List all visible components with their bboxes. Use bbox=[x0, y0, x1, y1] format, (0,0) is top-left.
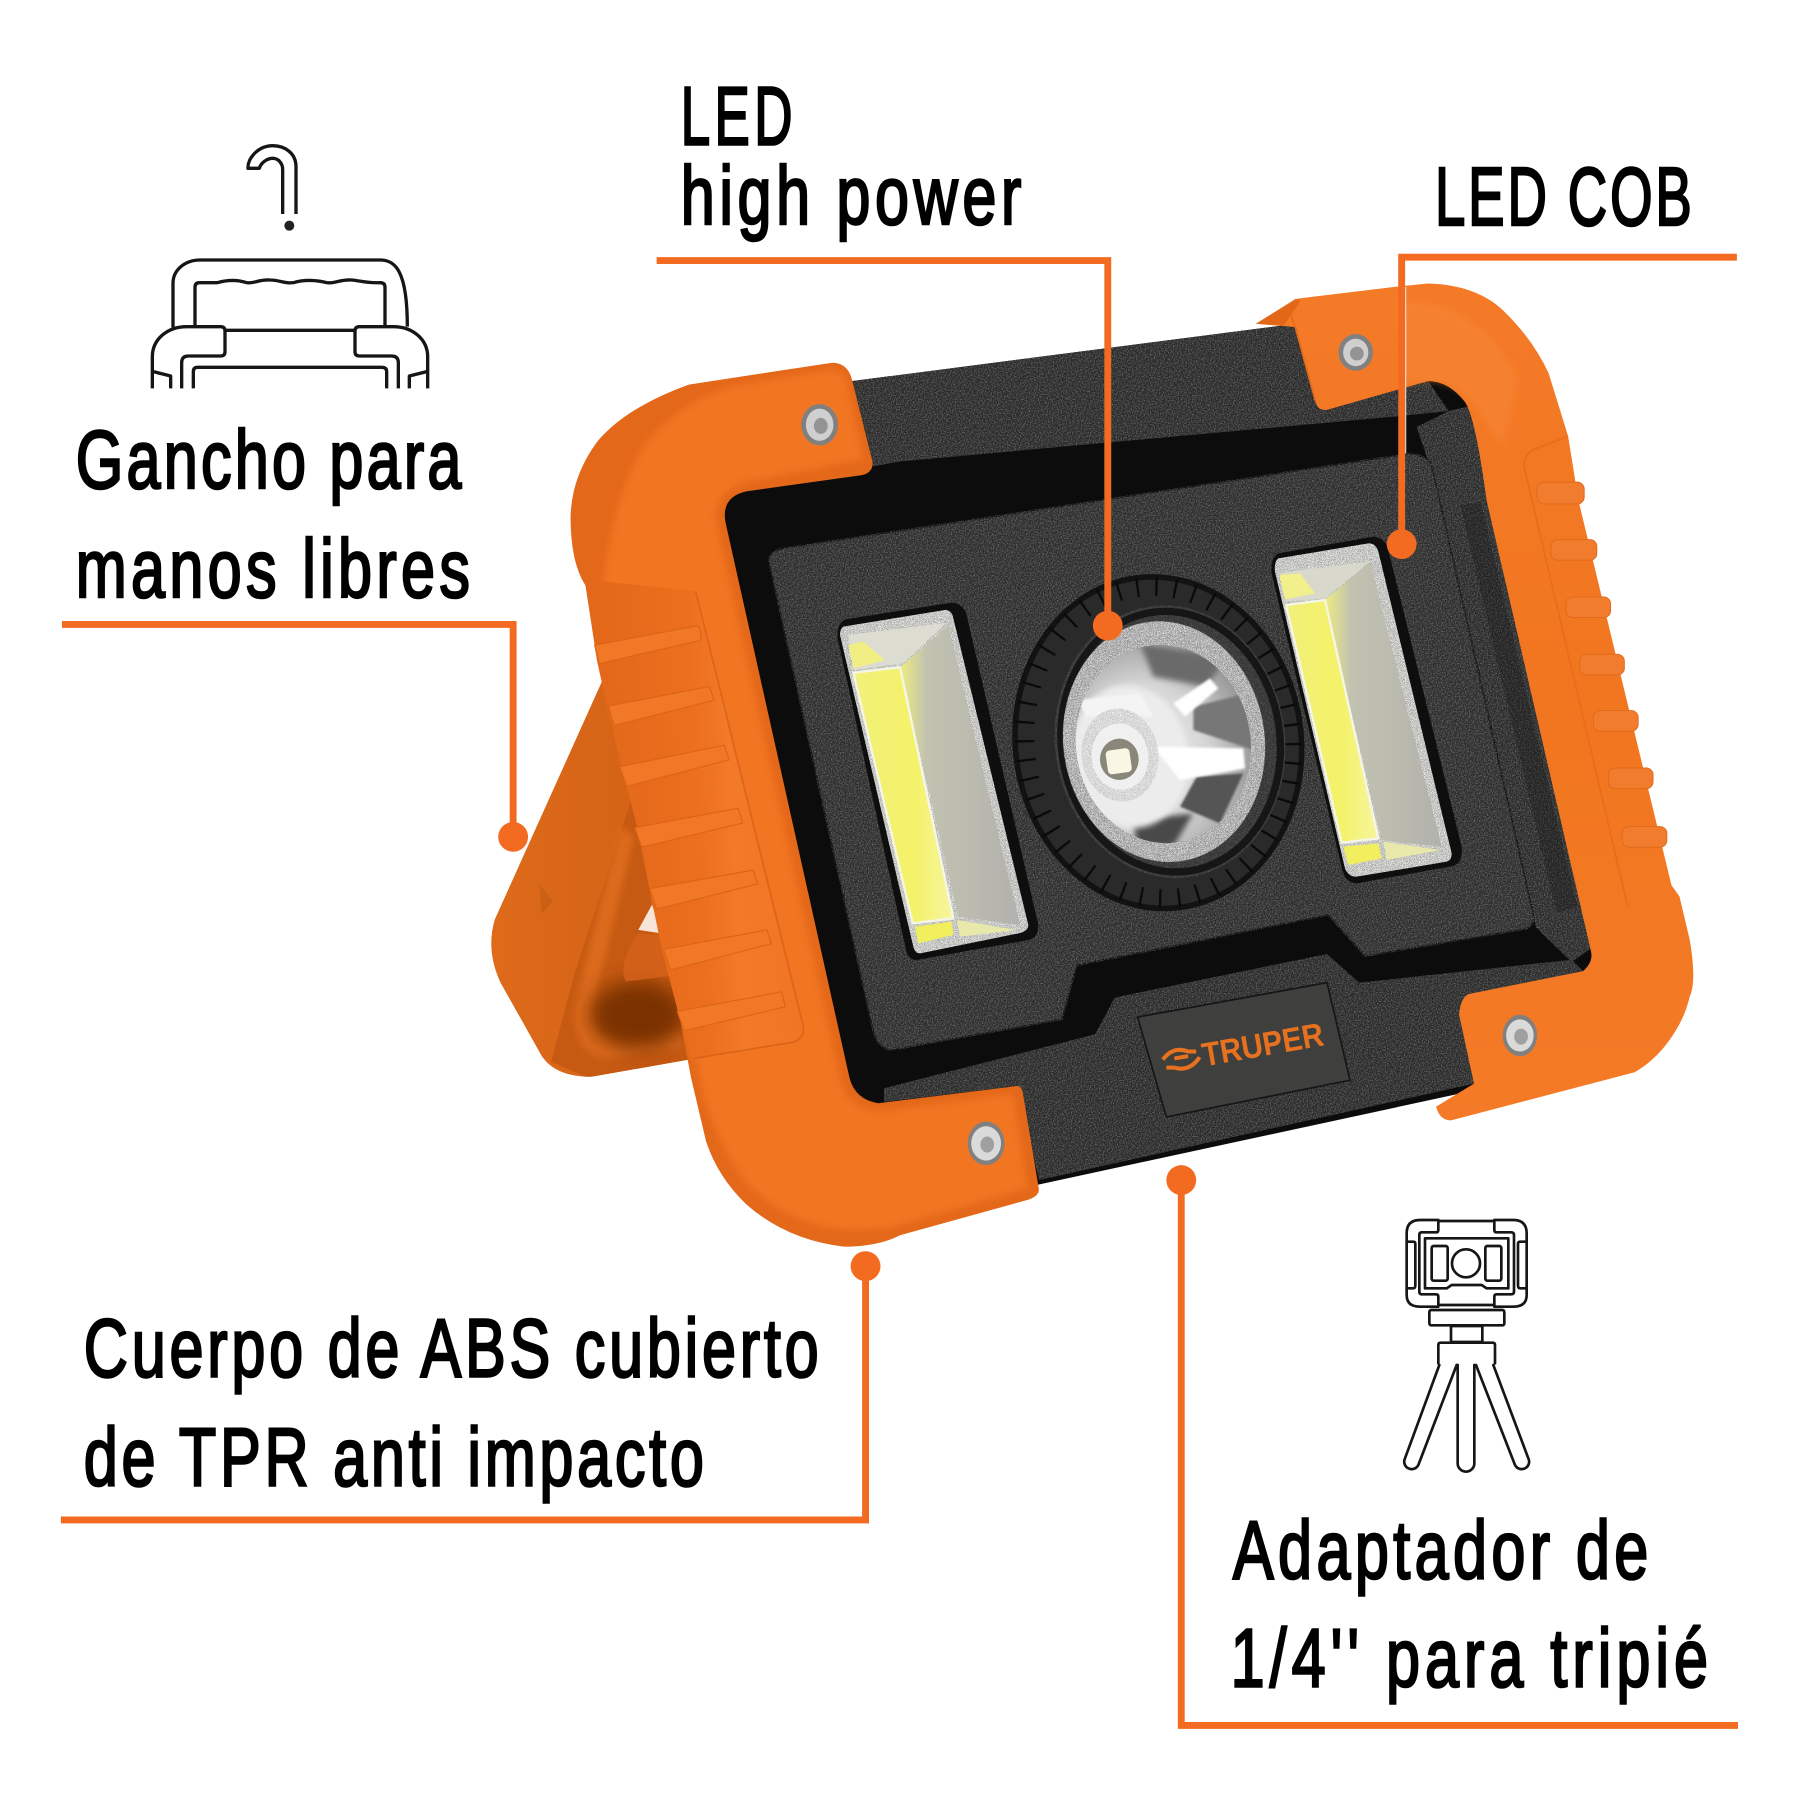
label: Gancho para manos libres: manos libres bbox=[76, 523, 470, 615]
leader: LED high power bbox=[657, 261, 1123, 641]
right grip teeth bbox=[1537, 482, 1667, 847]
folding stand bbox=[491, 682, 688, 1077]
right orange frame bbox=[1256, 284, 1693, 1120]
left grip ribs bbox=[595, 626, 785, 1031]
central high power LED lens bbox=[1012, 574, 1304, 912]
logo plate: TRUPER bbox=[1138, 983, 1350, 1117]
raised centre panel bbox=[769, 453, 1534, 1050]
label: LED COB: LED COB bbox=[1435, 151, 1692, 243]
label: Cuerpo de ABS: Cuerpo de ABS cubierto bbox=[84, 1303, 819, 1395]
label: Adaptador: 1/4'' para tripié bbox=[1231, 1612, 1708, 1705]
label: Cuerpo de ABS: de TPR anti impacto bbox=[84, 1412, 704, 1504]
label: LED high power: high power bbox=[681, 150, 1021, 242]
lower strip bbox=[884, 954, 1583, 1180]
icon: hook and handle bbox=[152, 146, 428, 388]
label: Adaptador: Adaptador de bbox=[1233, 1505, 1648, 1597]
black plate bbox=[709, 324, 1601, 1185]
label: Gancho para manos libres bbox=[76, 414, 470, 615]
leader: Gancho bbox=[62, 624, 528, 852]
left COB LED bbox=[837, 603, 1038, 960]
label: LED high power bbox=[681, 70, 1021, 242]
icon: light on tripod bbox=[1404, 1220, 1529, 1472]
leader: Adaptador bbox=[1166, 1165, 1738, 1725]
label: Adaptador bbox=[1231, 1505, 1708, 1705]
left orange frame bbox=[571, 363, 1039, 1247]
leader: Cuerpo bbox=[61, 1251, 880, 1520]
leader: LED COB bbox=[1387, 257, 1737, 559]
label: Gancho para manos libres: Gancho para bbox=[76, 414, 462, 506]
screws bbox=[801, 334, 1537, 1165]
right COB LED bbox=[1271, 537, 1462, 883]
logo plate: TRUPER: TRUPER bbox=[1199, 1017, 1327, 1074]
label: LED high power: LED bbox=[681, 70, 792, 163]
label: Cuerpo de ABS bbox=[84, 1303, 819, 1504]
